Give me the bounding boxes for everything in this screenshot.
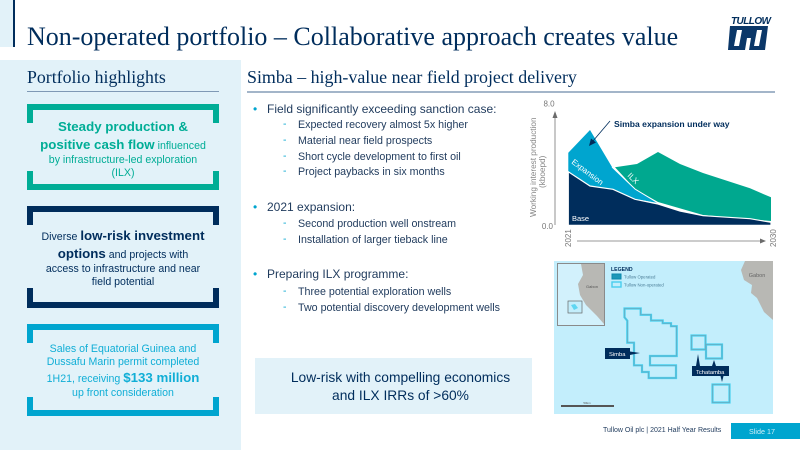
icon: Tullow logo	[728, 16, 773, 50]
expansion edge	[612, 167, 658, 203]
card: asset sales: up front consideration	[72, 387, 174, 399]
bullet list: -	[283, 218, 286, 229]
callout: low-risk economics: Low-risk with compelling economics	[291, 370, 510, 385]
chart axes	[552, 111, 766, 244]
chart labels: Simba expansion under way	[614, 119, 730, 129]
panel heading rule	[27, 91, 219, 92]
card: steady production: Steady production &	[58, 119, 188, 134]
card: asset sales	[27, 324, 219, 416]
bullet list: Three potential exploration wells	[298, 286, 451, 298]
card: asset sales: 1H21, receiving $133 million	[47, 370, 199, 385]
bullet list: -	[283, 119, 286, 130]
map legend: Tullow Operated	[624, 274, 656, 280]
area: base	[568, 172, 771, 225]
bullet list: Short cycle development to first oil	[298, 151, 461, 163]
bullet list: Installation of larger tieback line	[298, 234, 448, 246]
label: Tchatamba	[692, 354, 729, 382]
area: expansion	[568, 130, 658, 203]
area: ILX	[615, 152, 771, 221]
bullet list: -	[283, 135, 286, 146]
slide number	[731, 423, 800, 439]
bullet list: 2021 expansion:	[267, 200, 355, 214]
title: Non-operated portfolio – Collaborative approach creates value	[27, 22, 678, 51]
chart labels	[529, 100, 778, 247]
bullet list: •	[253, 102, 257, 116]
card: low-risk investment: field potential	[92, 276, 154, 288]
label: Tchatamba: Tchatamba	[696, 370, 725, 376]
bullet list: Two potential discovery development wells	[298, 302, 500, 314]
callout: low-risk economics	[255, 358, 532, 414]
card: steady production	[27, 104, 219, 190]
bullet list: -	[283, 151, 286, 162]
bullet list: Project paybacks in six months	[298, 166, 445, 178]
chart labels: 8.0	[543, 100, 555, 108]
map land: Gabon	[741, 261, 773, 320]
chart labels: ILX	[626, 171, 641, 186]
bullet list: Field significantly exceeding sanction case:	[267, 102, 496, 116]
card: low-risk investment: access to infrastructure and near	[46, 263, 200, 275]
inset map: Gabon	[586, 284, 598, 289]
chart labels: Working interest production	[529, 117, 538, 217]
map legend: LEGEND	[611, 267, 633, 273]
card: low-risk investment	[27, 206, 219, 308]
chart labels: Expansion	[570, 157, 605, 187]
map legend	[611, 267, 664, 288]
chart labels: (kboepd)	[538, 155, 547, 188]
chart labels: 2030	[769, 229, 778, 247]
map land: Gabon: Gabon	[749, 273, 765, 279]
card: steady production: positive cash flow influenced	[40, 137, 206, 152]
bullet list: •	[253, 267, 257, 281]
arrow: to expansion	[589, 121, 610, 146]
bullet list: -	[283, 286, 286, 297]
card: low-risk investment: Diverse low-risk investment	[42, 228, 204, 243]
chart labels: Base	[572, 214, 589, 223]
bullet list: Second production well onstream	[298, 218, 456, 230]
panel: portfolio highlights	[0, 60, 241, 450]
callout: low-risk economics: and ILX IRRs of >60%	[332, 388, 469, 403]
slide number: Slide 17	[749, 427, 775, 436]
label: Simba	[605, 348, 640, 359]
bullet list: -	[283, 302, 286, 313]
licence block: Simba	[624, 308, 677, 378]
card: steady production: by infrastructure-led exploration	[49, 154, 197, 166]
chart labels: 0.0	[542, 222, 554, 231]
bullet list: Preparing ILX programme:	[267, 267, 408, 281]
map: Simba and Tchatamba licences	[554, 261, 773, 414]
map legend: Tullow Non-operated	[624, 282, 664, 288]
bullet list: Material near field prospects	[298, 135, 432, 147]
scale bar: 50km	[583, 401, 591, 405]
section heading: Simba: Simba – high-value near field project delivery	[247, 67, 577, 87]
licence blocks: Tchatamba	[692, 336, 730, 402]
footer text: Tullow Oil plc | 2021 Half Year Results	[603, 427, 721, 434]
bullet list: -	[283, 234, 286, 245]
bullet list: •	[253, 200, 257, 214]
icon: Tullow logo: TULLOW	[731, 16, 773, 27]
bullet list: Expected recovery almost 5x higher	[298, 119, 468, 131]
area chart: working interest production	[529, 100, 778, 247]
scale bar	[561, 401, 614, 407]
label: Simba: Simba	[609, 352, 626, 358]
inset map	[558, 264, 604, 326]
bullet list	[253, 102, 500, 314]
card: asset sales: Sales of Equatorial Guinea and	[50, 343, 196, 355]
panel heading: Portfolio highlights	[27, 67, 166, 87]
card: steady production: (ILX)	[112, 167, 134, 179]
section heading rule	[247, 91, 775, 93]
card: asset sales: Dussafu Marin permit completed	[47, 356, 199, 368]
card: low-risk investment: options and projects with	[58, 246, 188, 261]
bullet list: -	[283, 166, 286, 177]
header accent strip	[0, 0, 15, 47]
chart labels: 2021	[564, 229, 573, 247]
